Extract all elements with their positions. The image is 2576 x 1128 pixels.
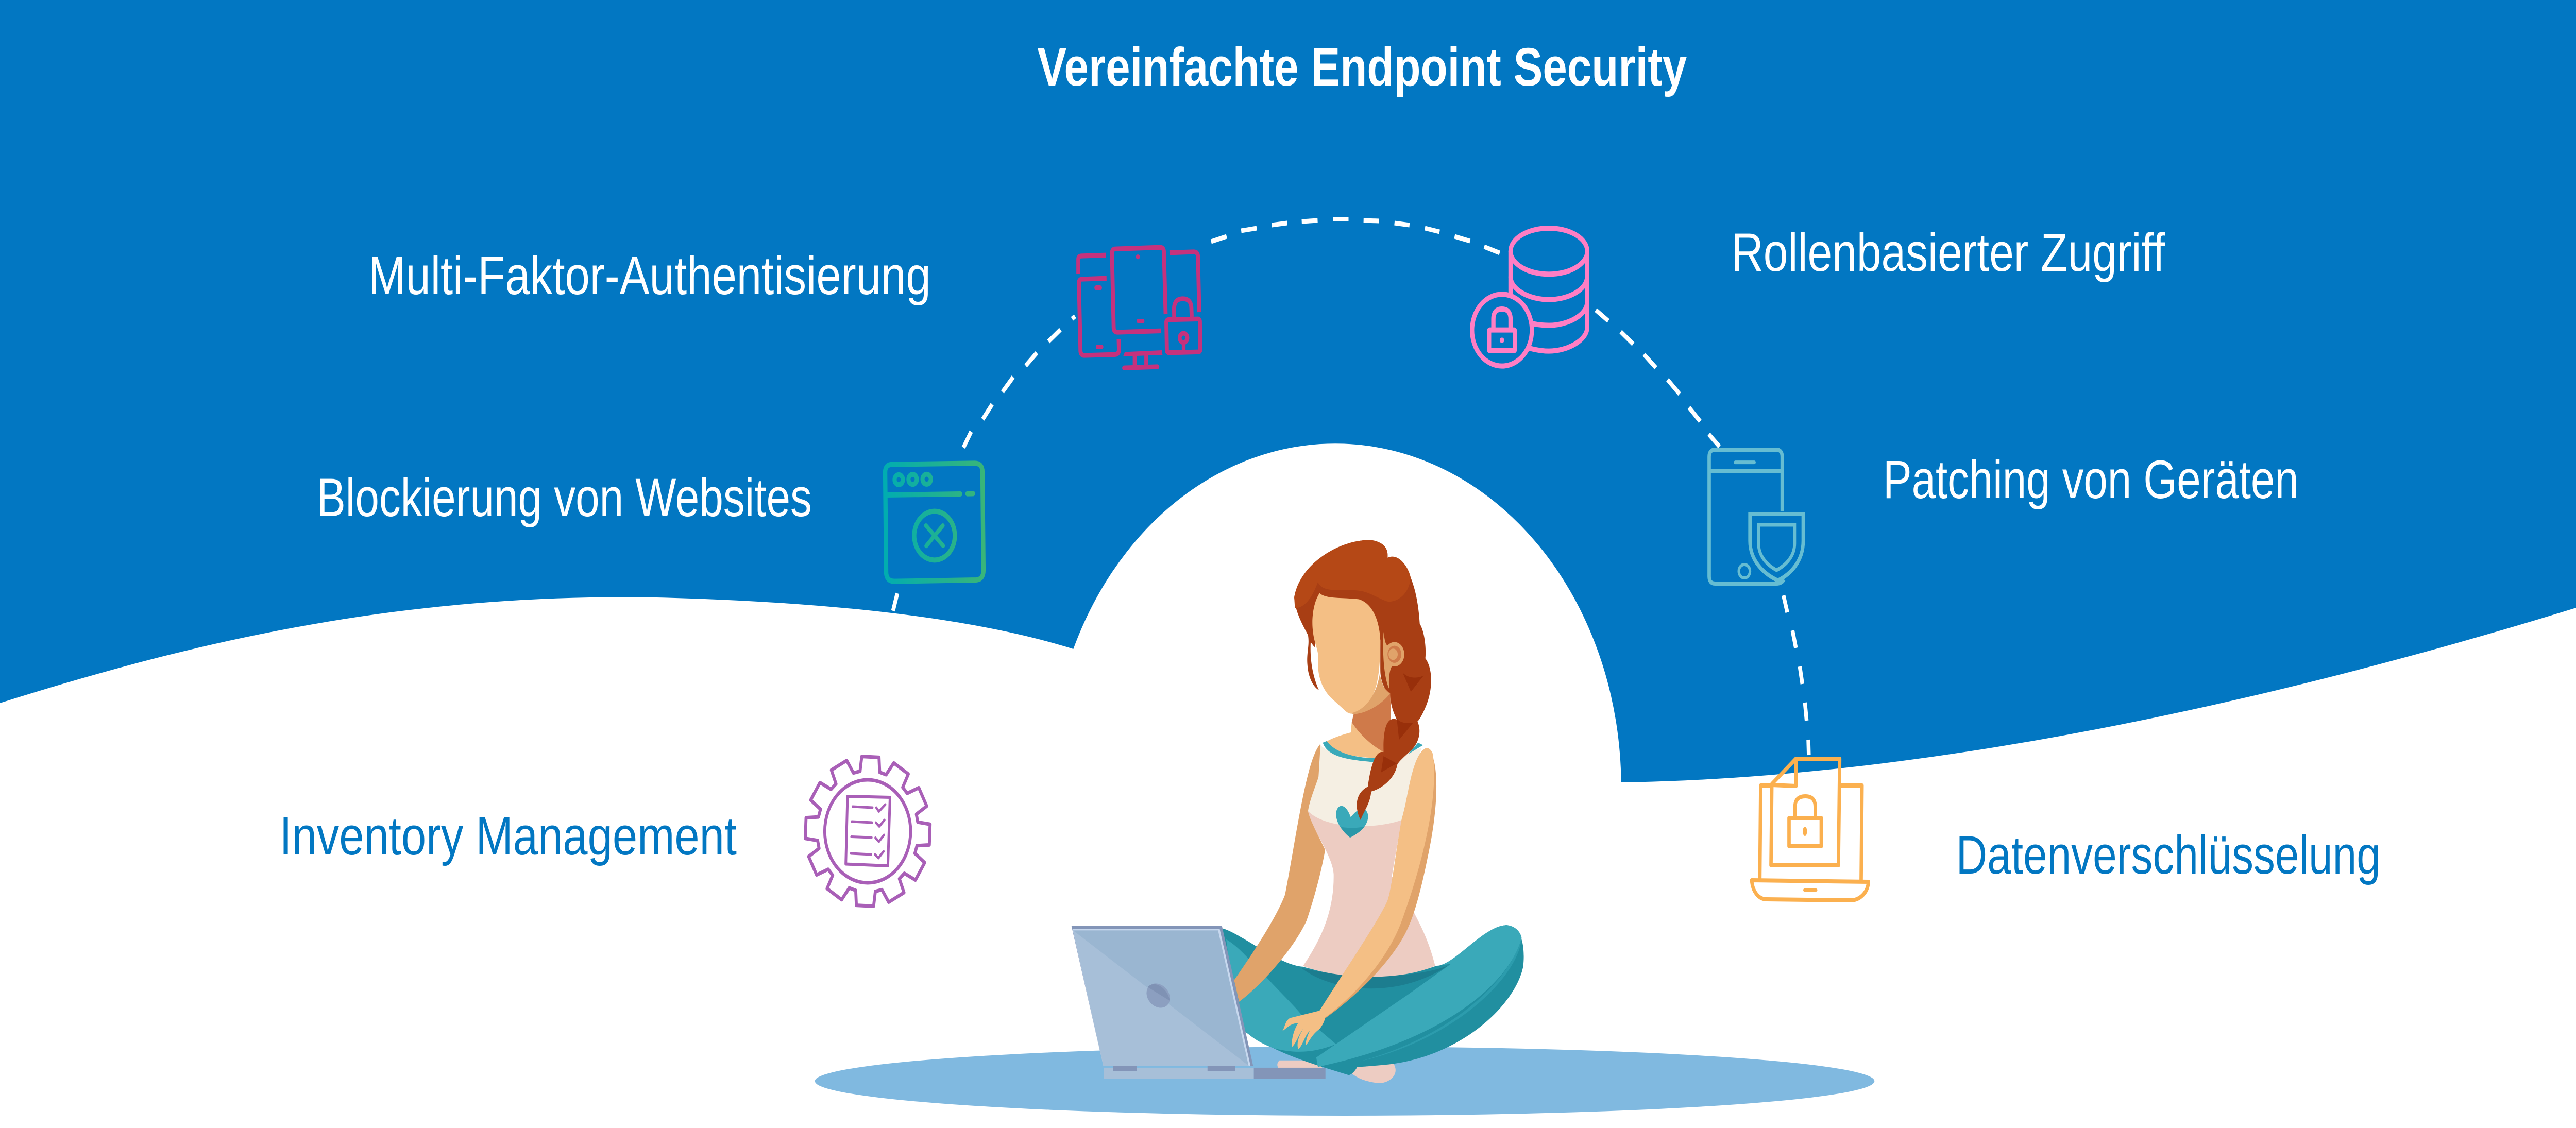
label: Inventory Management: Inventory Management (279, 807, 737, 866)
left arm (1234, 744, 1325, 1002)
label: Rollenbasierter Zugriff: Rollenbasierter Zugriff (1732, 223, 2165, 283)
label: Patching von Geräten: Patching von Geräten (1883, 450, 2299, 510)
laptop (1072, 926, 1326, 1079)
trousers (1223, 925, 1524, 1075)
hair and braid (1294, 540, 1431, 820)
icon: database with lock (1472, 228, 1587, 366)
face (1312, 593, 1390, 714)
icon: gear with checklist (803, 754, 933, 909)
dashed arc connecting the icons (893, 219, 1809, 755)
ear (1383, 632, 1404, 689)
icon: laptop with encrypted file (1752, 759, 1869, 900)
torso top (1303, 744, 1435, 977)
right arm and hand (1282, 748, 1436, 1049)
icon: phone with shield (1709, 450, 1803, 584)
heart (1336, 806, 1368, 838)
feet (1277, 1061, 1396, 1083)
blue wave background with dome cut-out (0, 0, 2576, 782)
icon: devices with lock (1078, 247, 1200, 368)
title: Vereinfachte Endpoint Security (1037, 38, 1687, 97)
label: Blockierung von Websites: Blockierung von Websites (317, 468, 812, 528)
label: Multi-Faktor-Authentisierung: Multi-Faktor-Authentisierung (368, 246, 931, 306)
illustration: woman with laptop (1072, 540, 1524, 1083)
floor ellipse (815, 1047, 1874, 1116)
icon: browser window with x (885, 463, 984, 582)
label: Datenverschlüsselung: Datenverschlüsselung (1956, 826, 2381, 885)
neck (1323, 681, 1423, 762)
